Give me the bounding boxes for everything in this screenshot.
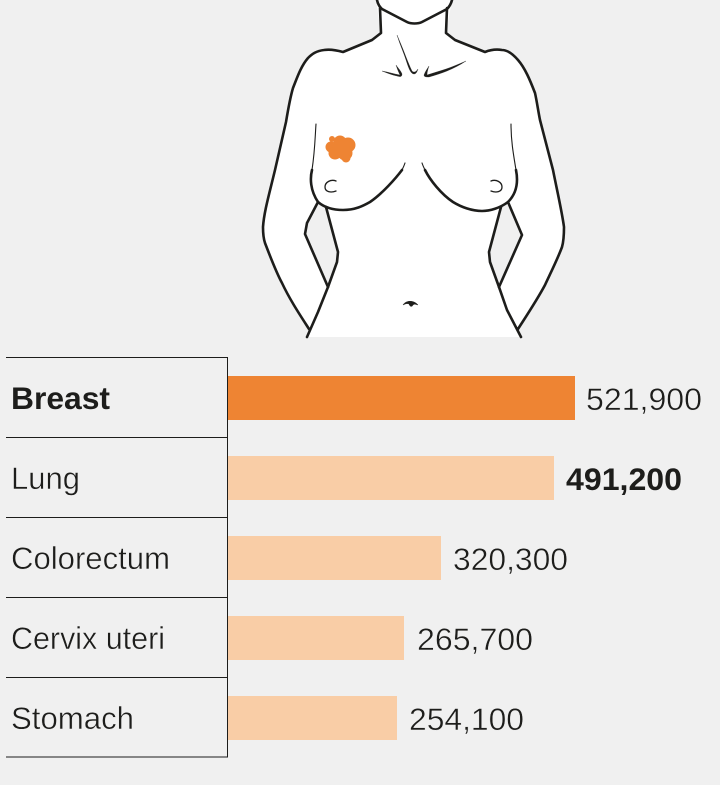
body outline (263, 0, 564, 337)
icon: orange tumour (326, 136, 356, 162)
torso silhouette (263, 0, 564, 337)
row: Colorectum (11, 536, 568, 580)
bar: Colorectum (228, 536, 441, 580)
bar: Breast (228, 376, 575, 420)
bar: Cervix uteri (228, 616, 404, 660)
row: Cervix uteri (11, 616, 533, 660)
value: Lung: 491,200 (566, 461, 682, 497)
collarbone lines (382, 35, 466, 77)
value: Cervix uteri: 265,700 (417, 621, 533, 657)
value: Breast: 521,900 (586, 381, 702, 417)
arm gaps (305, 202, 522, 287)
label: Stomach: Stomach (11, 700, 134, 736)
row: Lung (11, 456, 682, 500)
value: Colorectum: 320,300 (453, 541, 568, 577)
label: Breast: Breast (11, 380, 111, 416)
breast side lines (312, 124, 516, 170)
icon: navel (403, 301, 418, 306)
table rules (6, 358, 228, 757)
bar: Lung (228, 456, 554, 500)
label: Lung: Lung (11, 460, 80, 496)
value: Stomach: 254,100 (409, 701, 524, 737)
row: Stomach (11, 696, 524, 740)
illustration: female torso (263, 0, 564, 337)
row: Breast (11, 376, 702, 420)
icon: nipples (325, 180, 502, 192)
label: Cervix uteri: Cervix uteri (11, 620, 165, 656)
label: Colorectum: Colorectum (11, 540, 170, 576)
bar: Stomach (228, 696, 397, 740)
